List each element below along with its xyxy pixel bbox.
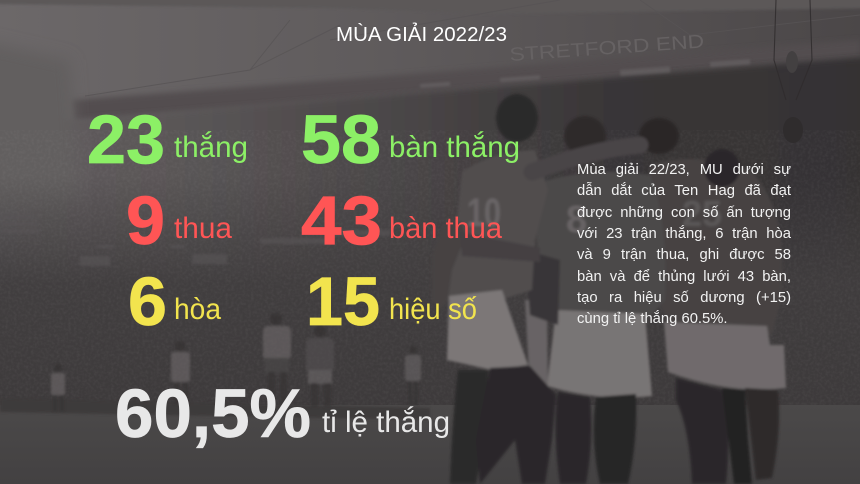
stat: 43 goals conceded: 43 bbox=[301, 182, 382, 259]
stat: +15 goal difference: hiệu số bbox=[389, 293, 477, 326]
stat: +15 goal difference: 15 bbox=[306, 263, 380, 340]
summary paragraph: với 23 trận thắng, 6 trận hòa bbox=[577, 226, 791, 242]
stat: 9 losses: 9 bbox=[126, 182, 165, 259]
player: centre-left bbox=[525, 250, 560, 395]
distant players bbox=[51, 313, 421, 411]
summary paragraph: bàn và để thủng lưới 43 bàn, bbox=[577, 269, 791, 285]
player: centre: 8 bbox=[566, 199, 587, 241]
player: right: 25 bbox=[682, 193, 722, 234]
summary paragraph: và 9 trận thua, ghi được 58 bbox=[577, 247, 791, 263]
players huddle bbox=[432, 94, 786, 484]
stat: 58 goals scored: bàn thắng bbox=[389, 131, 520, 164]
stat: 23 wins bbox=[87, 101, 248, 178]
summary paragraph: dẫn dắt của Ten Hag đã đạt bbox=[577, 183, 791, 199]
stat: 6 draws bbox=[128, 263, 222, 340]
arm over shoulder bbox=[532, 145, 640, 172]
player: right bbox=[639, 118, 786, 484]
stadium sign: STRETFORD END bbox=[509, 31, 705, 66]
stat: 58 goals scored: 58 bbox=[301, 101, 381, 178]
summary paragraph: tạo ra hiệu số dương (+15) bbox=[577, 290, 791, 306]
stat: 9 losses bbox=[126, 182, 233, 259]
summary paragraph: được những con số ấn tượng bbox=[577, 205, 791, 221]
summary paragraph bbox=[577, 162, 791, 327]
stat: 43 goals conceded: bàn thua bbox=[389, 212, 503, 245]
stat: 43 goals conceded bbox=[301, 182, 503, 259]
player: number 10 bbox=[432, 94, 556, 484]
stat: 60.5% win rate: 60,5% bbox=[115, 375, 311, 452]
title: MÙA GIẢI 2022/23 bbox=[336, 23, 507, 46]
player: centre bbox=[533, 116, 665, 484]
stat: 6 draws: 6 bbox=[128, 263, 167, 340]
stat: 23 wins: 23 bbox=[87, 101, 165, 178]
stat: 58 goals scored bbox=[301, 101, 520, 178]
stat: 60.5% win rate: tỉ lệ thắng bbox=[322, 406, 450, 439]
summary paragraph: Mùa giải 22/23, MU dưới sự bbox=[577, 162, 791, 178]
stat: 9 losses: thua bbox=[174, 212, 233, 245]
stat: +15 goal difference bbox=[306, 263, 477, 340]
stat: 60.5% win rate bbox=[115, 375, 450, 452]
player: number 10: 10 bbox=[467, 191, 501, 235]
stat: 23 wins: thắng bbox=[174, 131, 248, 164]
stat: 6 draws: hòa bbox=[174, 293, 222, 326]
summary paragraph: cùng tỉ lệ thắng 60.5%. bbox=[577, 311, 728, 327]
